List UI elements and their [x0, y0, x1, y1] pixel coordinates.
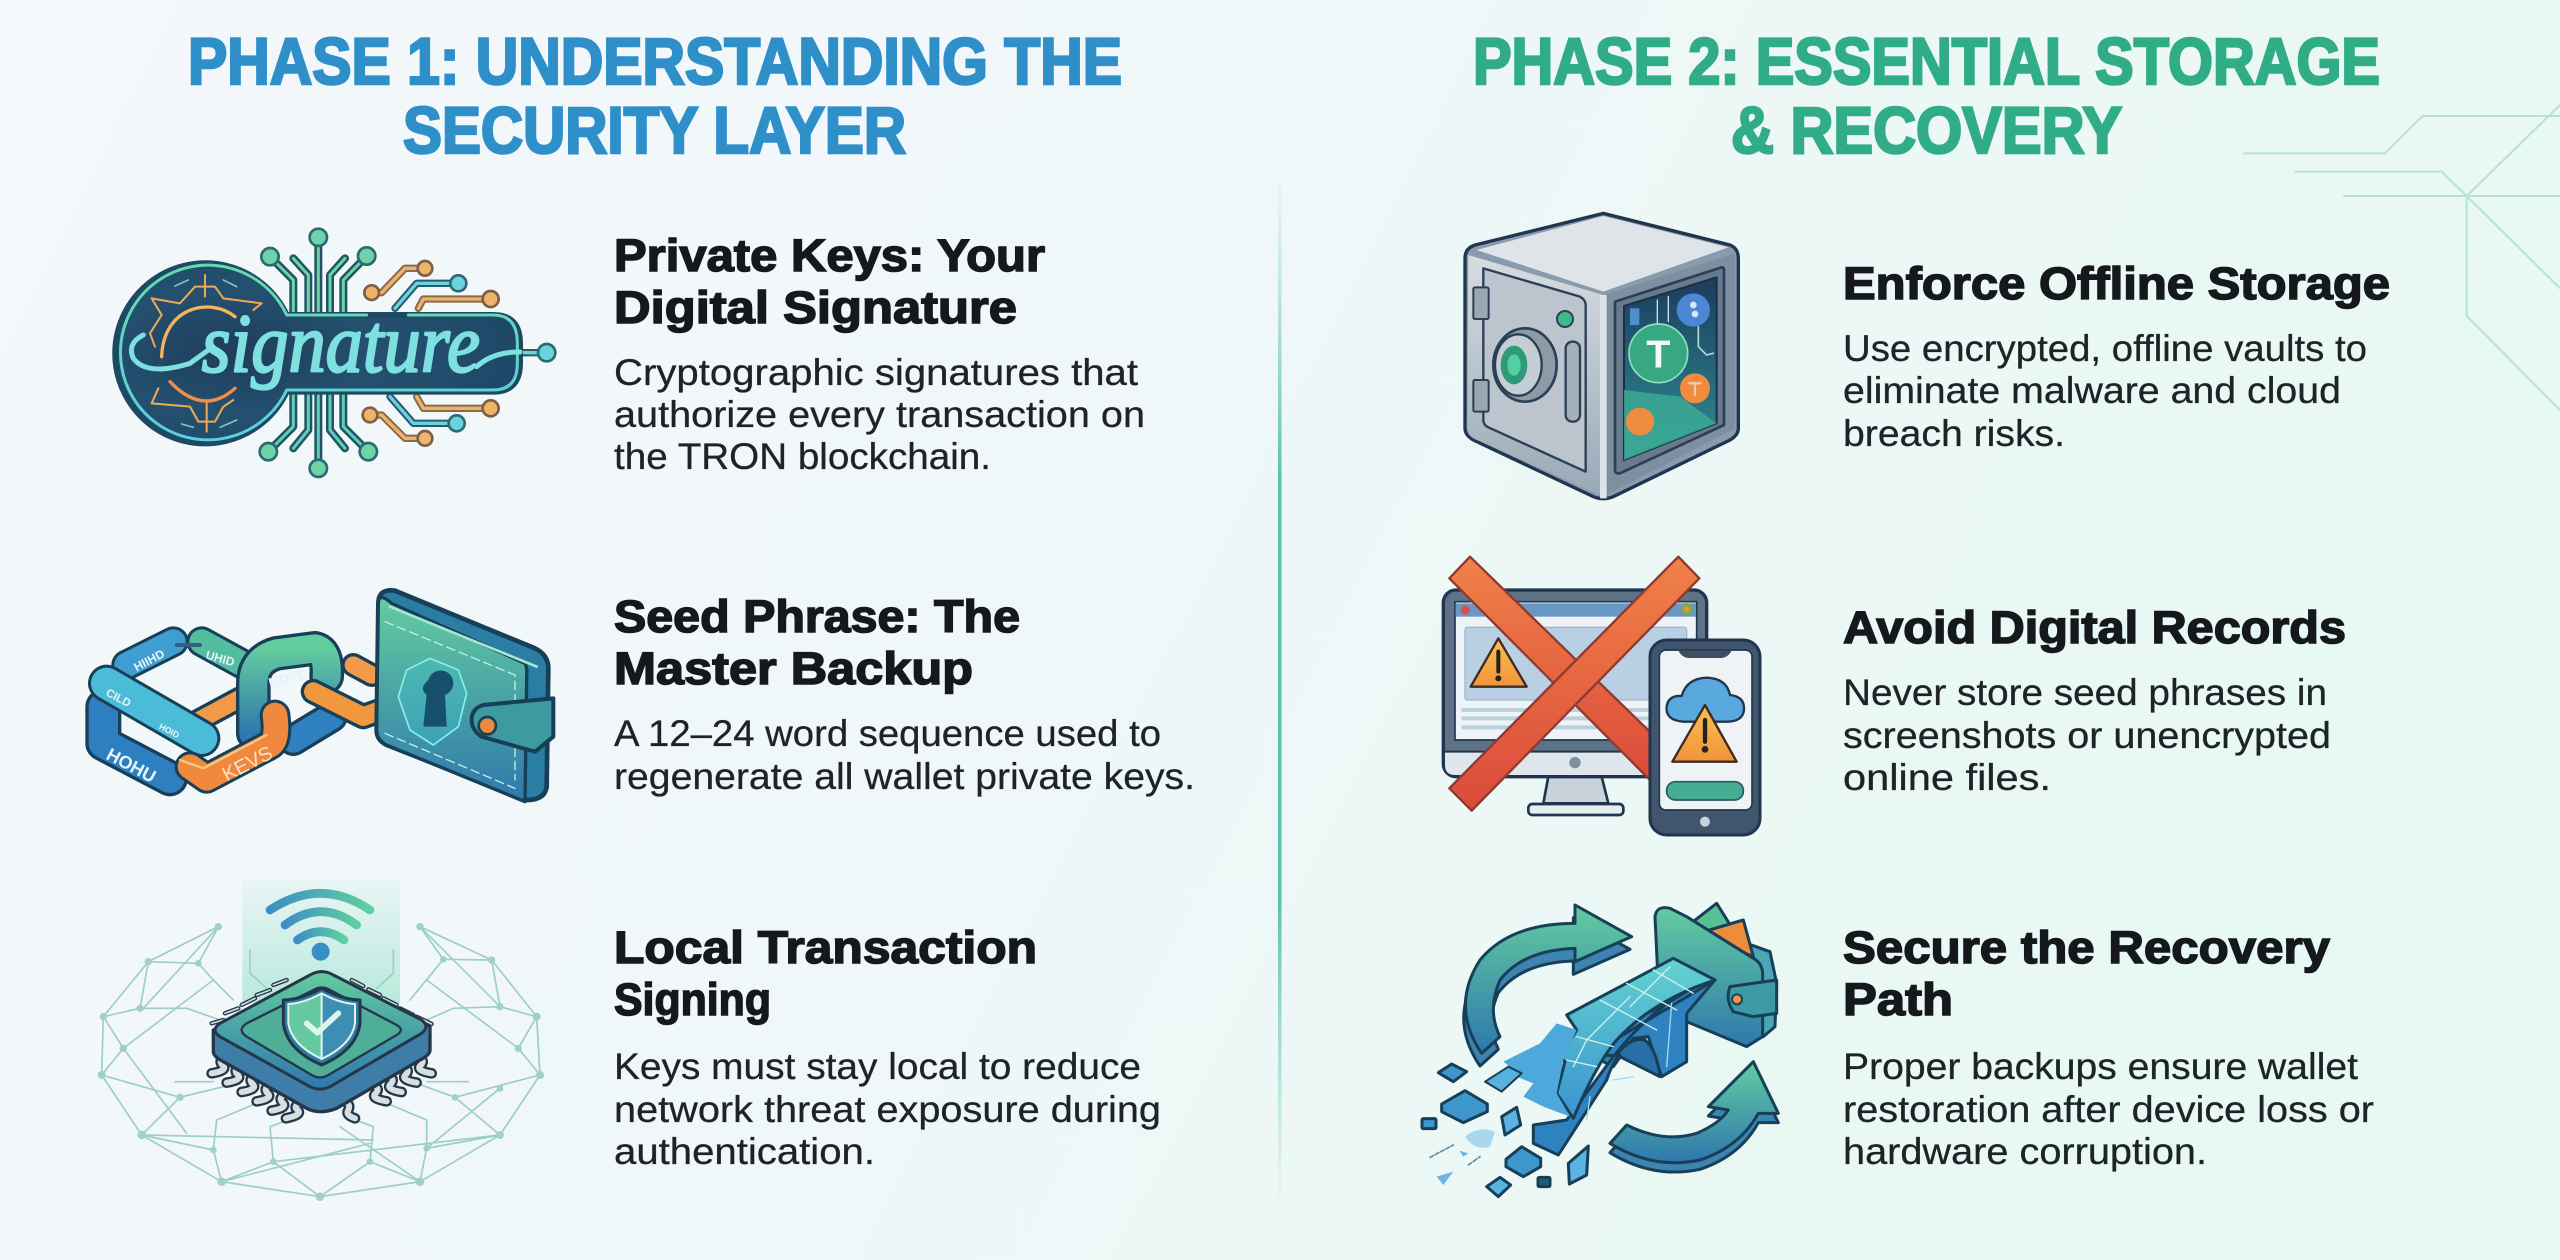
- script word: signature: [202, 299, 480, 391]
- body: offline storage: Use encrypted, offline vaults to: [1843, 328, 2367, 369]
- body: recovery path: [1843, 1046, 2374, 1172]
- heading: phase 1: PHASE 1: UNDERSTANDING THE: [188, 24, 1122, 98]
- bridge: [1485, 958, 1715, 1155]
- body: digital records: Never store seed phrases in: [1843, 672, 2327, 713]
- item: digital records: [1843, 602, 2346, 798]
- body: recovery path: restoration after device loss or: [1843, 1089, 2374, 1130]
- item: recovery path: [1843, 922, 2374, 1172]
- icon: signature key: [115, 229, 555, 477]
- body: digital records: screenshots or unencrypted: [1843, 715, 2331, 756]
- heading: recovery path: [1843, 922, 2330, 1025]
- heading: phase 2: PHASE 2: ESSENTIAL STORAGE: [1473, 24, 2380, 98]
- body: offline storage: eliminate malware and cloud: [1843, 370, 2341, 411]
- icon: safe vault: [1465, 213, 1738, 499]
- body: private keys: Cryptographic signatures that: [614, 352, 1139, 393]
- body: offline storage: breach risks.: [1843, 413, 2065, 454]
- chain labels: HIIHD: [132, 646, 167, 674]
- chip pins: [212, 980, 432, 1118]
- panel: phase 2: [1422, 24, 2390, 1197]
- heading: private keys: [614, 230, 1045, 333]
- body: seed phrase: [614, 713, 1195, 797]
- chain labels: HD7D: [267, 667, 310, 692]
- item: local transaction signing: [614, 922, 1161, 1172]
- body: local signing: [614, 1046, 1161, 1172]
- centre divider: [1278, 170, 1282, 1210]
- body: recovery path: Proper backups ensure wallet: [1843, 1046, 2359, 1087]
- item: seed phrase: [614, 591, 1195, 797]
- body: local signing: authentication.: [614, 1131, 875, 1172]
- body: recovery path: hardware corruption.: [1843, 1131, 2207, 1172]
- wifi symbol: [270, 893, 370, 956]
- body: private keys: authorize every transaction on: [614, 394, 1145, 435]
- heading: offline storage: Enforce Offline Storage: [1843, 258, 2390, 309]
- icon: chain and wallet: [103, 590, 553, 802]
- heading: seed phrase: [614, 591, 1020, 694]
- body: seed phrase: regenerate all wallet private keys.: [614, 756, 1195, 797]
- body: local signing: Keys must stay local to reduce: [614, 1046, 1141, 1087]
- bridge fragments: [1422, 1064, 1588, 1197]
- chain labels: UHID: [204, 648, 237, 669]
- heading: seed phrase: Master Backup: [614, 643, 973, 694]
- chain labels: [103, 646, 310, 787]
- body: seed phrase: A 12–24 word sequence used to: [614, 713, 1161, 754]
- body: digital records: online files.: [1843, 757, 2051, 798]
- icon: crossed-out monitor and phone: [1443, 557, 1760, 835]
- chain labels: CILD: [104, 687, 133, 710]
- heading: local signing: [614, 922, 1037, 1025]
- heading: private keys: Digital Signature: [614, 282, 1017, 333]
- heading: phase 1: [188, 24, 1122, 167]
- lower arrow: [1610, 1062, 1778, 1172]
- phone: [1650, 640, 1760, 835]
- heading: phase 1: SECURITY LAYER: [403, 93, 906, 167]
- body: private keys: [614, 352, 1145, 477]
- heading: local signing: Signing: [614, 974, 771, 1025]
- heading: local signing: Local Transaction: [614, 922, 1037, 973]
- chip body: [213, 972, 430, 1112]
- red X: [1449, 557, 1699, 811]
- chain labels: KEVS: [219, 742, 276, 786]
- heading: phase 2: & RECOVERY: [1731, 93, 2122, 167]
- tether symbol: T: [1646, 332, 1670, 376]
- icon: secure chip with wifi and network: [98, 880, 544, 1201]
- heading: phase 2: [1473, 24, 2380, 167]
- icon: broken bridge recovery path: [1422, 903, 1778, 1197]
- heading: private keys: Private Keys: Your: [614, 230, 1045, 281]
- heading: seed phrase: Seed Phrase: The: [614, 591, 1020, 642]
- body: private keys: the TRON blockchain.: [614, 436, 991, 477]
- body: digital records: [1843, 672, 2331, 798]
- panel: phase 1: [98, 24, 1195, 1201]
- item: private keys: [614, 230, 1145, 477]
- heading: digital records: Avoid Digital Records: [1843, 602, 2346, 653]
- chain labels: HOID: [157, 721, 181, 740]
- body: offline storage: [1843, 328, 2367, 454]
- vault window with coins: [1615, 267, 1724, 473]
- item: offline storage: [1843, 258, 2390, 454]
- upper arrow: [1464, 905, 1632, 1066]
- chain labels: HOHU: [103, 744, 159, 787]
- vault door: [1473, 268, 1586, 472]
- heading: recovery path: Secure the Recovery: [1843, 922, 2330, 973]
- circuit lines top right: [2243, 105, 2560, 410]
- wallet: [1655, 903, 1777, 1047]
- body: local signing: network threat exposure during: [614, 1089, 1161, 1130]
- heading: recovery path: Path: [1843, 974, 1953, 1025]
